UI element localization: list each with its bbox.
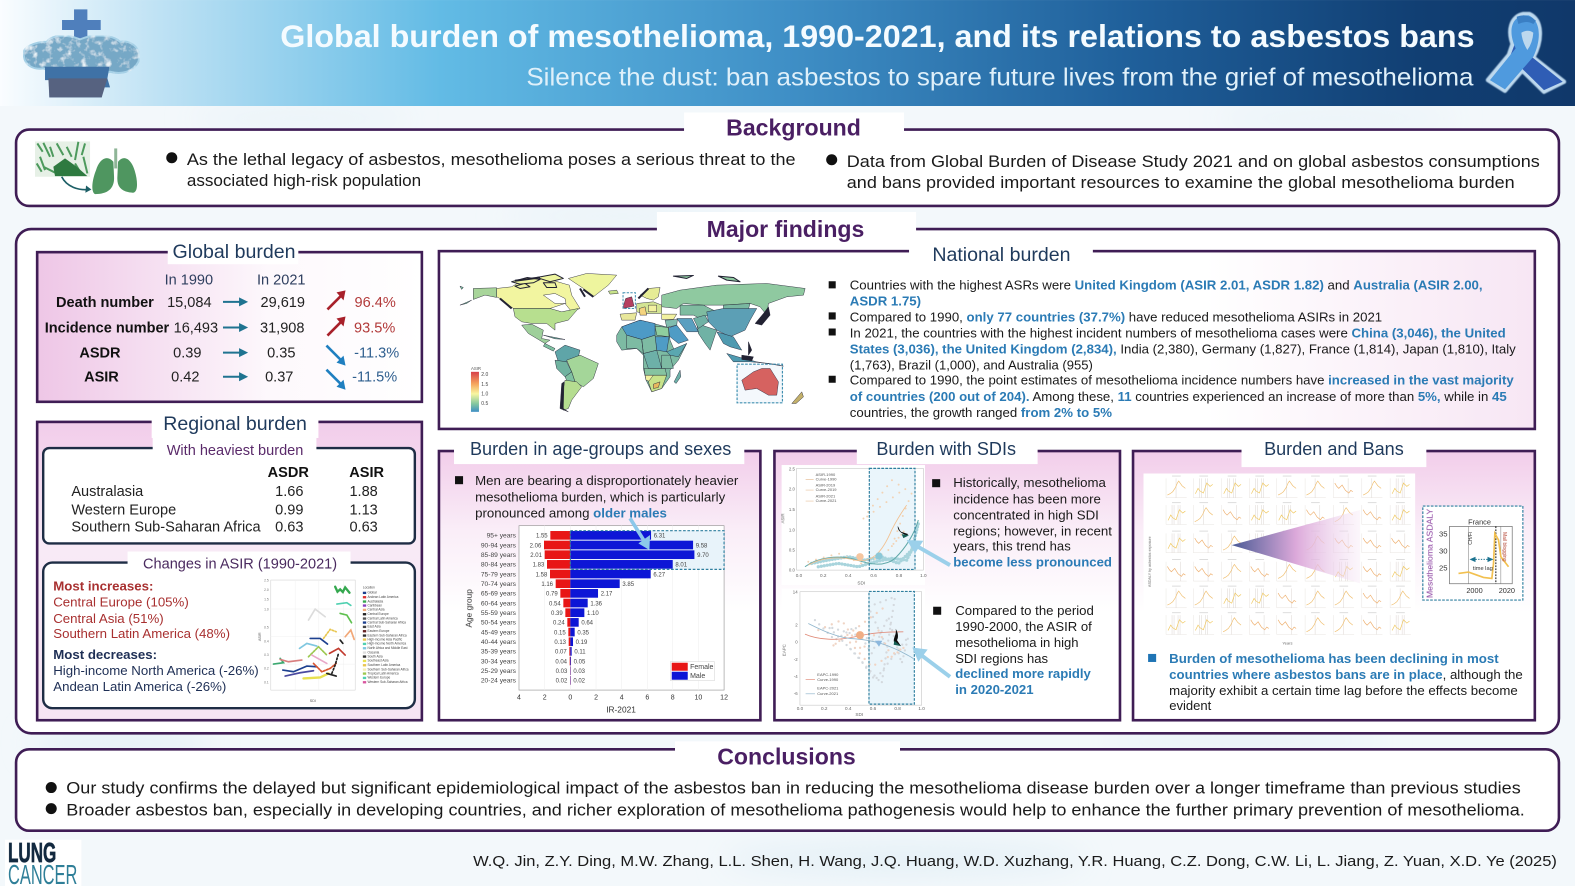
- panel: burden and bans: [1133, 435, 1535, 720]
- heading: Global burden: Global burden: [173, 241, 296, 263]
- chart: ASIR vs SDI scatter: ASIR-1990: [816, 472, 836, 477]
- chart: ASIR trajectories by SDI: Southern Sub-Saharan Africa: [368, 667, 409, 671]
- inset: France time lag chart: 25: [1439, 563, 1447, 572]
- chart: incidence rate pyramid: 9.58: [696, 543, 708, 549]
- table: global burden numbers: Incidence number: [45, 321, 170, 337]
- chart: EAPC vs SDI scatter: 14: [793, 589, 798, 594]
- table: heaviest burden: With heaviest burden: [167, 443, 303, 459]
- icon: awareness ribbon: [1488, 14, 1564, 92]
- chart: ASIR trajectories by SDI: Central Asia: [368, 608, 385, 612]
- chart: EAPC vs SDI scatter: 0.0: [797, 706, 804, 711]
- text: SDI finding two: [933, 603, 1094, 697]
- chart: country small multiples: [1143, 473, 1415, 647]
- chart: incidence rate pyramid: 0.35: [577, 630, 590, 636]
- chart: incidence rate pyramid: 30-34 years: [481, 658, 517, 665]
- chart: ASIR trajectories by SDI: Oceania: [368, 650, 380, 654]
- table: global burden numbers: In 1990: [165, 272, 213, 288]
- table: global burden numbers: [45, 272, 399, 386]
- chart: incidence rate pyramid: 0.02: [573, 679, 586, 685]
- chart: incidence rate pyramid: 0.05: [574, 659, 586, 665]
- text: national findings: Compared to 1990, the point estimates of mesothelioma incidence numbers have increased in the vast majority: [850, 373, 1514, 388]
- authors: W.Q. Jin, Z.Y. Ding, M.W. Zhang, L.L. Shen, H. Wang, J.Q. Huang, W.D. Xuzhang, Y.R. Huang, C.Z. Dong, C.W. Li, L. Jiang, Z. Yuan, X.D. Ye (2025): [473, 854, 1557, 870]
- table: global burden numbers: 0.37: [265, 370, 293, 386]
- chart: incidence rate pyramid: 1.36: [590, 601, 603, 607]
- chart: incidence rate pyramid: 0.79: [546, 592, 558, 598]
- chart: ASIR vs SDI scatter: 2.5: [789, 467, 796, 472]
- chart: incidence rate pyramid: 0.11: [574, 650, 586, 656]
- text: age group finding: mesothelioma burden, which is particularly: [475, 489, 726, 504]
- chart: ASIR trajectories by SDI: High-income North America: [368, 642, 406, 646]
- chart: incidence rate pyramid: 0.07: [555, 650, 567, 656]
- chart: ASIR trajectories by SDI: 0.4: [264, 639, 269, 643]
- panel: national burden: [439, 241, 1535, 429]
- chart: EAPC vs SDI scatter: [782, 588, 925, 718]
- chart: ASIR vs SDI scatter: Curve-2019: [816, 487, 837, 492]
- panel: burden with SDIs: [774, 435, 1120, 720]
- chart: ASIR vs SDI scatter: 1.0: [789, 527, 796, 532]
- chart: incidence rate pyramid: 0.54: [549, 601, 561, 607]
- text: SDI finding two: SDI regions has: [955, 651, 1049, 666]
- heading: Background: Background: [726, 115, 861, 141]
- heading: Major findings: Major findings: [707, 216, 864, 242]
- chart: incidence rate pyramid: 40-44 years: [481, 639, 517, 646]
- table: heaviest burden: 1.88: [349, 484, 378, 500]
- chart: ASIR trajectories by SDI: Caribbean: [368, 603, 382, 607]
- inset: France time lag chart: France: [1468, 518, 1491, 527]
- text: SDI finding one: years, this trend has: [953, 538, 1071, 553]
- text: age group finding: pronounced among older males: [475, 505, 667, 520]
- heading: Conclusions: [675, 741, 900, 769]
- chart: ASIR trajectories by SDI: SDI: [310, 699, 316, 703]
- chart: incidence rate pyramid: 0: [568, 694, 572, 701]
- text: SDI finding two: Compared to the period: [955, 603, 1094, 618]
- text: conclusion one: Our study confirms the delayed but significant epidemiological impact of the asbestos ban in reducing the mesothelioma disease burden over a longer timeframe than previous studies: [66, 779, 1521, 798]
- table: global burden numbers: ASIR: [84, 370, 119, 386]
- chart: ASIR vs SDI scatter: ASIR: [780, 513, 785, 523]
- chart: incidence rate pyramid: 75-79 years: [481, 571, 517, 578]
- table: global burden numbers: 0.42: [171, 370, 199, 386]
- text: age group finding: [455, 473, 739, 520]
- chart: EAPC vs SDI scatter: 0.6: [870, 706, 877, 711]
- chart: ASIR vs SDI scatter: 0.2: [820, 573, 827, 578]
- table: heaviest burden: 1.13: [349, 502, 378, 518]
- table: global burden numbers: -11.3%: [354, 346, 399, 362]
- table: global burden numbers: 16,493: [174, 321, 218, 337]
- text: national findings: countries, the growth ranged from 2% to 5%: [850, 405, 1112, 420]
- chart: incidence rate pyramid: 2: [543, 694, 547, 701]
- icon: asbestos to lungs: [35, 141, 137, 194]
- chart: EAPC vs SDI scatter: -6: [794, 691, 798, 696]
- table: heaviest burden: ASIR: [349, 465, 384, 481]
- text: SDI finding one: Historically, mesothelioma: [953, 475, 1107, 490]
- chart: EAPC vs SDI scatter: -2: [794, 657, 798, 662]
- text: bans finding: countries where asbestos bans are in place , although the: [1169, 667, 1523, 682]
- table: heaviest burden: [43, 438, 415, 543]
- chart: incidence rate pyramid: 1.55: [536, 534, 548, 540]
- chart: incidence rate pyramid: 90-94 years: [481, 542, 517, 549]
- chart: EAPC vs SDI scatter: 1.0: [918, 706, 925, 711]
- chart: incidence rate pyramid: 3.85: [622, 582, 635, 588]
- chart: ASIR trajectories by SDI: Central Latin America: [368, 616, 398, 620]
- text: most decreases: Andean Latin America (-26%): [53, 679, 226, 694]
- table: global burden numbers: 93.5%: [354, 321, 395, 337]
- table: heaviest burden: 0.99: [275, 502, 303, 518]
- chart: ASIR trajectories by SDI: North Africa and Middle East: [368, 646, 408, 650]
- text: SDI finding one: concentrated in high SDI: [953, 507, 1099, 522]
- chart: ASIR trajectories by SDI: 2.5: [264, 578, 269, 582]
- chart: EAPC vs SDI scatter: 0.4: [845, 706, 852, 711]
- chart: incidence rate pyramid: 1.10: [587, 611, 599, 617]
- chart: incidence rate pyramid: 1.83: [533, 563, 545, 569]
- chart: ASIR vs SDI scatter: Curve-2021: [816, 498, 837, 503]
- heading: Regional burden: Regional burden: [163, 413, 307, 435]
- panel: regional burden: [37, 412, 422, 720]
- chart: incidence rate pyramid: 45-49 years: [481, 629, 517, 636]
- chart: ASIR trajectories by SDI: Australasia: [368, 599, 383, 603]
- heading: SDIs: [857, 435, 1038, 464]
- icon: cloud and tombstone: [23, 9, 139, 97]
- legend: female and male: Male: [690, 673, 705, 680]
- text: national findings: [829, 277, 1516, 420]
- chart: incidence rate pyramid: 8: [671, 694, 675, 701]
- panel: changes in ASIR: [43, 551, 415, 708]
- chart: ASIR vs SDI scatter: 1.5: [789, 507, 796, 512]
- heading: age groups: [454, 435, 744, 464]
- chart: ASIR vs SDI scatter: 0.0: [796, 573, 803, 578]
- inset: France time lag chart: 2000: [1466, 586, 1483, 595]
- chart: incidence rate pyramid: 0.24: [553, 621, 565, 627]
- chart: ASIR vs SDI scatter: 0.6: [870, 573, 877, 578]
- legend: ASIR colour bar: 2.0: [481, 372, 488, 378]
- chart: EAPC vs SDI scatter: -4: [794, 674, 798, 679]
- chart: incidence rate pyramid: 0.03: [556, 669, 568, 675]
- text: bullet right: Data from Global Burden of Disease Study 2021 and on global asbestos consumptions: [847, 152, 1540, 171]
- text: most decreases: [53, 647, 259, 694]
- chart: incidence rate pyramid: 1.16: [541, 582, 554, 588]
- chart: incidence rate pyramid: 4: [620, 694, 624, 701]
- chart: incidence rate pyramid: 0.04: [555, 659, 568, 665]
- chart: ASIR trajectories by SDI: ASIR: [258, 632, 262, 641]
- text: conclusion two: Broader asbestos ban, especially in developing countries, and richer exploration of mesothelioma pathogenesis would help to enhance the further primary prevention of mesothelioma.: [66, 801, 1525, 820]
- heading: SDIs: Burden with SDIs: [876, 439, 1016, 459]
- chart: EAPC vs SDI scatter: Curve-1990: [817, 677, 839, 682]
- chart: ASIR trajectories by SDI: Location: [363, 585, 375, 589]
- chart: incidence rate pyramid: 65-69 years: [481, 591, 517, 598]
- heading: Conclusions: Conclusions: [717, 743, 856, 769]
- chart: incidence rate pyramid: 8.01: [675, 563, 688, 569]
- chart: incidence rate pyramid: 95+ years: [487, 533, 517, 540]
- chart: ASIR vs SDI scatter: 2.0: [789, 487, 796, 492]
- text: bans finding: majority exhibit a certain time lag before the effects become: [1169, 683, 1518, 698]
- heading: burden and bans: [1242, 435, 1426, 467]
- text: most increases: [53, 579, 230, 641]
- chart: EAPC vs SDI scatter: 0.2: [821, 706, 828, 711]
- chart: ASIR vs SDI scatter: ASIR-2021: [816, 493, 836, 498]
- panel: global burden: [37, 240, 422, 402]
- text: most increases: Central Europe (105%): [53, 595, 189, 610]
- chart: incidence rate pyramid: 12: [720, 694, 728, 701]
- logo: Lung Cancer journal: [5, 837, 81, 886]
- chart: incidence rate pyramid: 4: [517, 694, 521, 701]
- table: global burden numbers: 31,908: [260, 321, 305, 337]
- text: most decreases: Most decreases:: [53, 647, 157, 662]
- chart: incidence rate pyramid: 80-84 years: [481, 562, 517, 569]
- text: bans finding: evident: [1169, 698, 1212, 713]
- chart: EAPC vs SDI scatter: 0.8: [894, 706, 901, 711]
- table: heaviest burden: Australasia: [71, 484, 144, 500]
- arrows: 1990 to 2021: [223, 297, 248, 381]
- chart: incidence rate pyramid: 25-29 years: [481, 668, 517, 675]
- text: bullet left: As the lethal legacy of asbestos, mesothelioma poses a serious threat to the: [187, 150, 796, 169]
- table: heaviest burden: ASDR: [268, 465, 309, 481]
- chart: incidence rate pyramid: 35-39 years: [481, 649, 517, 656]
- chart: ASIR trajectories by SDI: 0.1: [264, 680, 269, 684]
- legend: ASIR colour bar: 1.5: [481, 382, 488, 388]
- inset: France time lag chart: 30: [1439, 546, 1447, 555]
- legend: female and male: Female: [690, 664, 714, 671]
- text: SDI finding two: in 2020-2021: [955, 682, 1034, 697]
- inset: France time lag chart: time lag: [1473, 566, 1493, 572]
- chart: ASIR trajectories by SDI: Eastern Sub-Saharan Africa: [368, 633, 407, 637]
- text: bullet right: and bans provided important resources to examine the global mesothelioma burden: [847, 173, 1515, 192]
- chart: incidence rate pyramid: 0.64: [581, 621, 594, 627]
- background panel: [16, 113, 1559, 206]
- chart: EAPC vs SDI scatter: 2: [795, 622, 798, 627]
- chart: incidence rate pyramid: 6.31: [654, 534, 666, 540]
- chart: ASIR trajectories by SDI: 0.3: [264, 653, 269, 657]
- text: most increases: Central Asia (51%): [53, 611, 164, 626]
- inset: France time lag chart: 35: [1439, 530, 1447, 539]
- text: SDI finding two: 1990-2000, the ASIR of: [955, 619, 1092, 634]
- chart: incidence rate pyramid: 60-64 years: [481, 600, 517, 607]
- chart: incidence rate pyramid: 6.27: [653, 572, 666, 578]
- text: national findings: ASDR 1.75): [850, 293, 921, 308]
- chart: ASIR vs SDI scatter: 0.0: [789, 568, 796, 573]
- chart: incidence rate pyramid: [464, 518, 728, 714]
- text: bans finding: [1148, 651, 1523, 713]
- chart: ASIR vs SDI scatter: SDI: [857, 580, 865, 585]
- text: SDI finding one: regions; however, in recent: [953, 523, 1112, 538]
- chart: incidence rate pyramid: 55-59 years: [481, 610, 517, 617]
- chart: ASIR vs SDI scatter: [780, 465, 927, 585]
- chart: country small multiples: ASDALY by asbestos exposure: [1148, 536, 1152, 587]
- chart: EAPC vs SDI scatter: EAPC-2021: [817, 685, 839, 690]
- legend: ASIR colour bar: [471, 366, 488, 412]
- table: global burden numbers: ASDR: [79, 346, 121, 362]
- heading: burden and bans: Burden and Bans: [1264, 439, 1404, 459]
- chart: incidence rate pyramid: IR-2021: [606, 704, 636, 714]
- text: SDI finding two: declined more rapidly: [955, 666, 1092, 681]
- chart: incidence rate pyramid: 0.02: [556, 679, 568, 685]
- text: bans finding: Burden of mesothelioma has been declining in most: [1169, 651, 1499, 666]
- heading: National burden: National burden: [932, 244, 1071, 266]
- panel: burden in age groups and sexes: [439, 435, 760, 720]
- chart: ASIR trajectories by SDI: Central Sub-Saharan Africa: [368, 620, 406, 624]
- text: SDI finding one: incidence has been more: [953, 491, 1101, 506]
- inset: France time lag chart: Mail blogging: [1501, 532, 1507, 562]
- table: heaviest burden: 1.66: [275, 484, 303, 500]
- chart: ASIR trajectories by SDI: 1.0: [264, 607, 269, 611]
- text: national findings: Countries with the highest ASRs were United Kingdom (ASIR 2.01, ASDR 1.82) and Australia (ASIR 2.00,: [850, 277, 1483, 292]
- text: most increases: Most increases:: [53, 579, 153, 594]
- table: heaviest burden: Western Europe: [71, 502, 176, 518]
- heading: National burden: [909, 241, 1093, 267]
- conclusions panel: [16, 741, 1559, 831]
- logo: Lung Cancer journal: LUNG: [8, 837, 56, 868]
- text: national findings: Compared to 1990, only 77 countries (37.7%) have reduced mesothelioma ASIRs in 2021: [850, 309, 1382, 324]
- arrows: trend: [326, 290, 346, 390]
- chart: incidence rate pyramid: 9.70: [697, 553, 709, 559]
- chart: incidence rate pyramid: 0.15: [554, 630, 566, 636]
- subtitle: Silence the dust: ban asbestos to spare future lives from the grief of mesothelioma: [526, 63, 1474, 91]
- chart: incidence rate pyramid: 70-74 years: [481, 581, 517, 588]
- title: Global burden of mesothelioma, 1990-2021, and its relations to asbestos bans: [280, 19, 1475, 54]
- chart: incidence rate pyramid: 6: [645, 694, 649, 701]
- chart: ASIR trajectories by SDI: Tropical Latin America: [368, 671, 399, 675]
- table: heaviest burden: 0.63: [275, 519, 303, 535]
- chart: incidence rate pyramid: 10: [695, 694, 702, 701]
- chart: incidence rate pyramid: 2.17: [601, 592, 613, 598]
- chart: ASIR vs SDI scatter: 0.4: [845, 573, 852, 578]
- header banner: [0, 0, 1575, 106]
- arrow: to high SDI top: [907, 540, 950, 565]
- heading: age groups: Burden in age-groups and sexes: [470, 439, 731, 459]
- chart: incidence rate pyramid: 0.03: [573, 669, 586, 675]
- chart: incidence rate pyramid: 0.13: [554, 640, 567, 646]
- chart: incidence rate pyramid: 20-24 years: [481, 678, 517, 685]
- inset: France time lag chart: CH/Fi: [1468, 532, 1474, 545]
- chart: ASIR trajectories by SDI: Western Sub-Saharan Africa: [368, 680, 408, 684]
- chart: incidence rate pyramid: 2.06: [530, 543, 542, 549]
- table: global burden numbers: 0.35: [267, 346, 295, 362]
- chart: ASIR trajectories by SDI: 2.0: [264, 588, 269, 592]
- text: bullet left: [166, 150, 796, 190]
- chart: ASIR vs SDI scatter: 0.5: [789, 548, 796, 553]
- text: bullet left: associated high-risk population: [187, 171, 421, 190]
- chart: EAPC vs SDI scatter: 0: [795, 639, 798, 644]
- chart: EAPC vs SDI scatter: EAPC-1990: [817, 672, 839, 677]
- chart: ASIR trajectories by SDI: South Asia: [368, 654, 383, 658]
- text: SDI finding one: [932, 475, 1112, 570]
- chart: ASIR vs SDI scatter: 1.0: [920, 573, 927, 578]
- chart: ASIR trajectories by SDI: Global: [368, 591, 377, 595]
- text: age group finding: Men are bearing a disproportionately heavier: [475, 473, 739, 488]
- text: national findings: (1,763), Brazil (1,000), and Australia (955): [850, 358, 1093, 373]
- chart: ASIR trajectories by SDI: 1.5: [264, 598, 269, 602]
- text: national findings: States (3,036), the United Kingdom (2,834), India (2,380), Germany (1,827), France (1,814), Japan (1,810), Italy: [850, 342, 1516, 357]
- text: national findings: In 2021, the countries with the highest incident numbers of mesothelioma cases were China (3,046), the United: [850, 326, 1506, 341]
- chart: incidence rate pyramid: 1.58: [536, 572, 548, 578]
- chart: ASIR trajectories by SDI: [258, 578, 409, 703]
- chart: ASIR trajectories by SDI: 0.2: [264, 667, 269, 671]
- text: most decreases: High-income North America (-26%): [53, 663, 259, 678]
- legend: ASIR colour bar: ASIR: [471, 366, 481, 371]
- table: global burden numbers: Death number: [56, 295, 154, 311]
- chart: ASIR trajectories by SDI: Southern Latin America: [368, 663, 401, 667]
- legend: female and male: [670, 662, 714, 681]
- chart: ASIR trajectories by SDI: Western Europe: [368, 676, 391, 680]
- table: global burden numbers: 15,084: [167, 295, 212, 311]
- chart: incidence rate pyramid: 50-54 years: [481, 620, 517, 627]
- chart: incidence rate pyramid: 2: [594, 694, 598, 701]
- chart: ASIR vs SDI scatter: Curve-1990: [816, 477, 837, 482]
- table: heaviest burden: 0.63: [349, 519, 378, 535]
- chart: incidence rate pyramid: 0.39: [551, 611, 563, 617]
- text: bullet right: [826, 152, 1540, 192]
- chart: incidence rate pyramid: 85-89 years: [481, 552, 517, 559]
- inset: France time lag chart: [1423, 506, 1523, 600]
- table: global burden numbers: 96.4%: [355, 295, 396, 311]
- chart: ASIR vs SDI scatter: 0.8: [896, 573, 903, 578]
- chart: incidence rate pyramid: Age group: [464, 589, 474, 628]
- zoom wedge to France: [1232, 510, 1360, 583]
- chart: ASIR trajectories by SDI: Southeast Asia: [368, 659, 389, 663]
- arrow: to high SDI bottom: [912, 647, 950, 677]
- inset: France time lag chart: 2020: [1499, 586, 1515, 595]
- text: most increases: Southern Latin America (48%): [53, 626, 230, 641]
- text: SDI finding one: become less pronounced: [953, 555, 1112, 570]
- chart: EAPC vs SDI scatter: EAPC: [782, 644, 787, 656]
- panel: changes in ASIR: Changes in ASIR (1990-2021): [143, 557, 337, 573]
- chart: incidence rate pyramid: 2.01: [530, 553, 543, 559]
- text: national findings: of countries (200 out of 204). Among these, 11 countries experienced an increase of more than 5%, while in 45: [850, 389, 1507, 404]
- table: global burden numbers: In 2021: [257, 272, 306, 288]
- legend: ASIR colour bar: 1.0: [481, 392, 488, 398]
- chart: ASIR trajectories by SDI: Eastern Europe: [368, 629, 390, 633]
- chart: incidence rate pyramid: 0.19: [576, 640, 588, 646]
- chart: ASIR trajectories by SDI: High-income Asia Pacific: [368, 637, 403, 641]
- chart: ASIR trajectories by SDI: East Asia: [368, 625, 381, 629]
- table: heaviest burden: Southern Sub-Saharan Africa: [71, 519, 261, 535]
- legend: ASIR colour bar: 0.5: [481, 401, 488, 407]
- chart: ASIR trajectories by SDI: Central Europe: [368, 612, 389, 616]
- table: global burden numbers: 0.39: [173, 346, 201, 362]
- chart: ASIR trajectories by SDI: 0.5: [264, 625, 269, 629]
- text: SDI finding two: mesothelioma in high: [955, 635, 1079, 650]
- chart: country small multiples: Years: [1282, 640, 1292, 645]
- chart: ASIR vs SDI scatter: ASIR-2019: [816, 482, 836, 487]
- chart: ASIR trajectories by SDI: Andean Latin America: [368, 595, 399, 599]
- heading: Background: [684, 113, 904, 143]
- arrow: to older males: [630, 518, 650, 550]
- major findings panel: [16, 212, 1559, 733]
- chart: EAPC vs SDI scatter: SDI: [855, 712, 863, 717]
- map: world ASIR choropleth: [460, 273, 805, 412]
- chart: EAPC vs SDI scatter: Curve-2021: [817, 691, 839, 696]
- inset: France time lag chart: Mesothelioma ASDALY: [1425, 509, 1435, 598]
- table: global burden numbers: 29,619: [261, 295, 305, 311]
- heading: Major findings: [657, 212, 916, 242]
- table: global burden numbers: -11.5%: [352, 370, 397, 386]
